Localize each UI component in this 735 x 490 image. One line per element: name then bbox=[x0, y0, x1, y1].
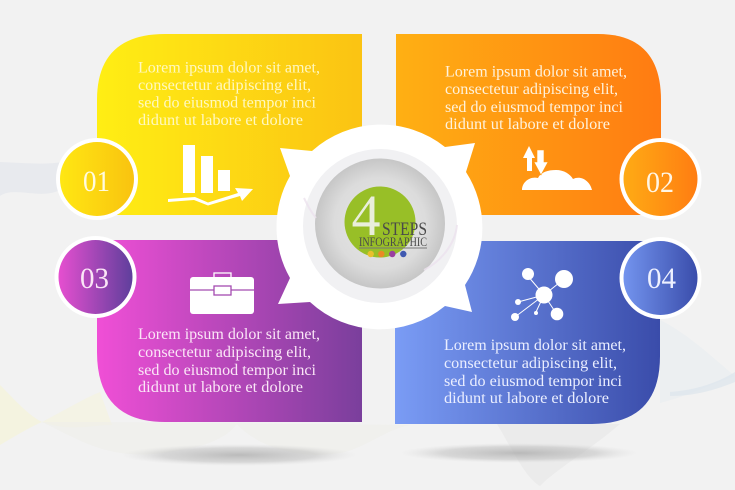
text: step 4: Lorem ipsum dolor sit amet, bbox=[444, 337, 626, 354]
title text: STEPS bbox=[382, 219, 427, 240]
faint swooshes bbox=[304, 198, 457, 270]
center hub bbox=[276, 125, 482, 329]
badge: 01: 01 bbox=[83, 165, 110, 198]
text: step 2: Lorem ipsum dolor sit amet, bbox=[445, 64, 627, 80]
green circle bbox=[344, 186, 416, 258]
text: step 3: consectetur adipiscing elit, bbox=[138, 344, 311, 361]
underline bbox=[359, 248, 427, 249]
icon: cloud with transfer arrows bbox=[522, 146, 592, 190]
badge: 02: 02 bbox=[646, 166, 674, 199]
text: step 1: Lorem ipsum dolor sit amet, bbox=[138, 60, 320, 76]
panel: step 3 purple bbox=[97, 240, 362, 422]
shadow under lower right panel bbox=[400, 443, 638, 463]
text: step 4: sed do eiusmod tempor inci bbox=[444, 373, 623, 390]
text: step 3: Lorem ipsum dolor sit amet, bbox=[138, 326, 320, 343]
text: step 2: didunt ut labore et dolore bbox=[445, 116, 610, 133]
text: step 3: sed do eiusmod tempor inci bbox=[138, 362, 317, 379]
shadow under lower left panel bbox=[121, 444, 357, 466]
badge: 01 bbox=[56, 138, 138, 220]
text: step 1: didunt ut labore et dolore bbox=[138, 112, 303, 129]
panel: step 1 yellow bbox=[97, 34, 362, 215]
panel: step 4 blue bbox=[395, 241, 660, 424]
badge: 04 bbox=[620, 237, 702, 319]
badge: 02 bbox=[620, 138, 702, 220]
icon: bar chart with arrow bbox=[168, 145, 253, 206]
grey disc bbox=[315, 158, 445, 288]
icon: molecule network bbox=[511, 268, 573, 321]
badge: 03 bbox=[54, 236, 136, 318]
badge: 03: 03 bbox=[80, 262, 109, 295]
light ring bbox=[303, 149, 457, 303]
icon: briefcase bbox=[190, 273, 254, 314]
badge: 04: 04 bbox=[647, 262, 676, 295]
text: step 3: didunt ut labore et dolore bbox=[138, 379, 303, 396]
text: step 2: sed do eiusmod tempor inci bbox=[445, 99, 624, 116]
background waves bbox=[0, 162, 735, 486]
white star ring bbox=[276, 125, 482, 329]
subtitle text: INFOGRAPHIC bbox=[359, 234, 427, 249]
text: step 1: consectetur adipiscing elit, bbox=[138, 77, 311, 94]
numeral 4: 4 bbox=[352, 183, 380, 248]
colour dots bbox=[368, 251, 406, 257]
text: step 4: consectetur adipiscing elit, bbox=[444, 355, 617, 372]
text: step 1: sed do eiusmod tempor inci bbox=[138, 94, 317, 112]
text: step 4: didunt ut labore et dolore bbox=[444, 390, 609, 407]
panel: step 2 orange bbox=[396, 34, 661, 215]
text: step 2: consectetur adipiscing elit, bbox=[445, 81, 618, 98]
